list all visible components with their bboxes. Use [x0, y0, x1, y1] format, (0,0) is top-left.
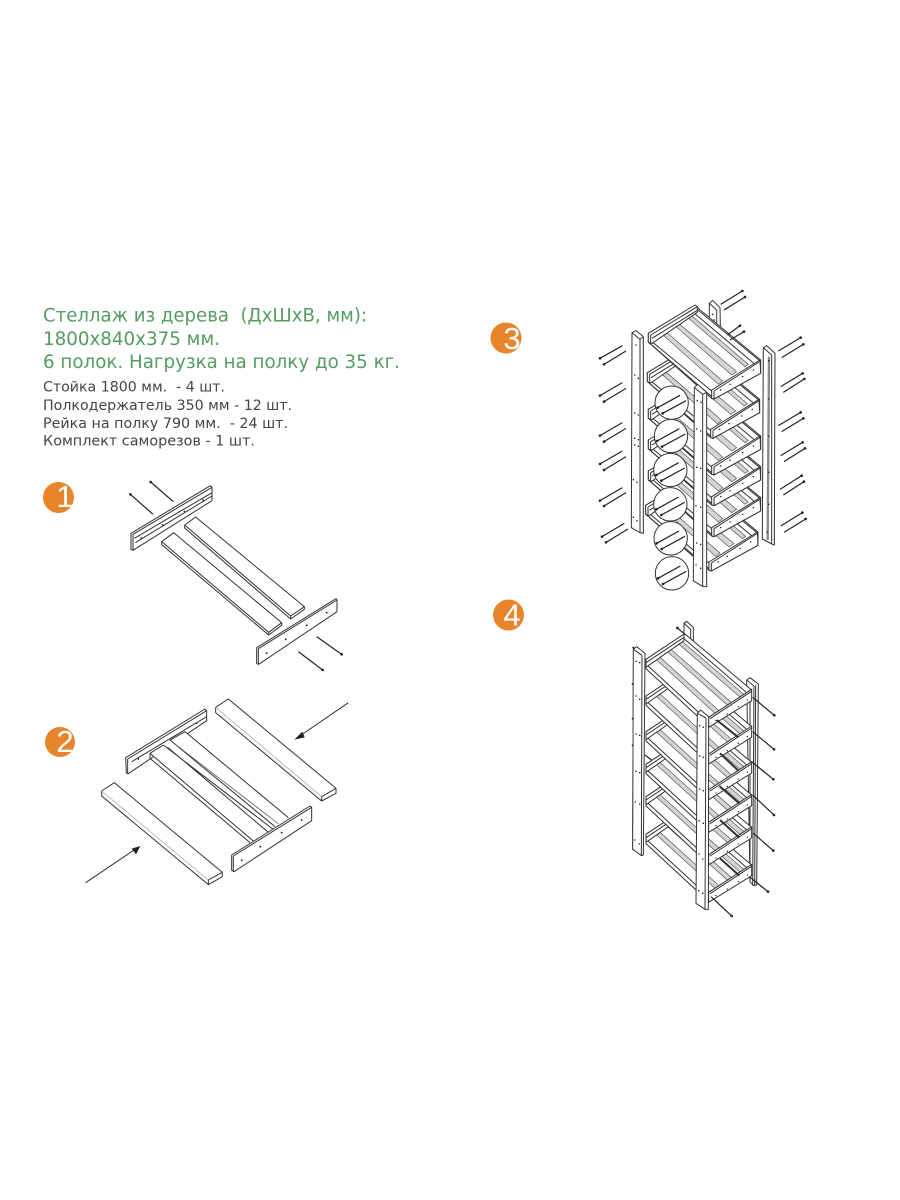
step 3 badge — [490, 321, 522, 356]
rear screws — [632, 628, 684, 850]
step 2 diagram — [86, 699, 348, 885]
front post — [696, 710, 709, 909]
shelves — [646, 305, 761, 571]
far post — [684, 621, 693, 642]
step 2 badge: 2 — [56, 724, 74, 759]
step 3 badge: 3 — [503, 321, 521, 356]
circle 5 — [654, 522, 687, 555]
step 4 badge — [493, 598, 524, 632]
parts list: Полкодержатель 350 мм - 12 шт. — [43, 398, 292, 414]
front bracket — [232, 806, 312, 872]
circle 1 — [655, 386, 688, 419]
shelf slats — [149, 732, 288, 843]
step 2 badge — [45, 724, 75, 759]
screws in front of bracket — [298, 637, 342, 670]
title: 1800x840x375 мм. — [43, 329, 220, 350]
slat right — [185, 517, 304, 619]
side board left — [102, 783, 222, 885]
left screws — [600, 346, 628, 542]
right back post — [747, 678, 758, 886]
title — [43, 306, 400, 373]
step 4 badge: 4 — [503, 598, 521, 632]
parts list — [43, 380, 292, 450]
circle 6 — [655, 557, 689, 590]
screw detail circles — [654, 386, 689, 590]
screws behind back bracket — [130, 482, 173, 514]
left post — [633, 647, 645, 856]
top screws — [721, 291, 745, 340]
circle 3 — [654, 453, 687, 487]
parts list: Рейка на полку 790 мм. - 24 шт. — [43, 416, 288, 432]
parts list: Комплект саморезов - 1 шт. — [43, 434, 255, 450]
arrow right — [294, 703, 348, 740]
step 4 assembled rack — [632, 621, 774, 916]
step 3 exploded diagram — [600, 291, 806, 590]
title: 6 полок. Нагрузка на полку до 35 кг. — [43, 352, 400, 373]
right screws — [778, 338, 806, 532]
back post — [709, 300, 721, 345]
step 1 diagram — [130, 482, 342, 670]
arrow left — [86, 846, 140, 883]
left post — [631, 331, 643, 533]
title: Стеллаж из дерева (ДхШхВ, мм): — [43, 306, 367, 326]
front bracket — [257, 599, 337, 664]
parts list: Стойка 1800 мм. - 4 шт. — [43, 380, 225, 396]
slat left — [162, 533, 282, 635]
circle 2 — [654, 419, 688, 453]
step 1 badge: 1 — [56, 479, 74, 514]
side screws — [711, 697, 774, 916]
back bracket — [131, 486, 212, 550]
shelves — [646, 634, 752, 902]
front post — [693, 384, 707, 587]
right post — [762, 346, 775, 545]
circle 4 — [654, 488, 687, 521]
step 1 badge — [43, 479, 74, 514]
side board right — [216, 699, 336, 801]
inner screws — [717, 720, 739, 876]
back bracket — [126, 709, 207, 774]
